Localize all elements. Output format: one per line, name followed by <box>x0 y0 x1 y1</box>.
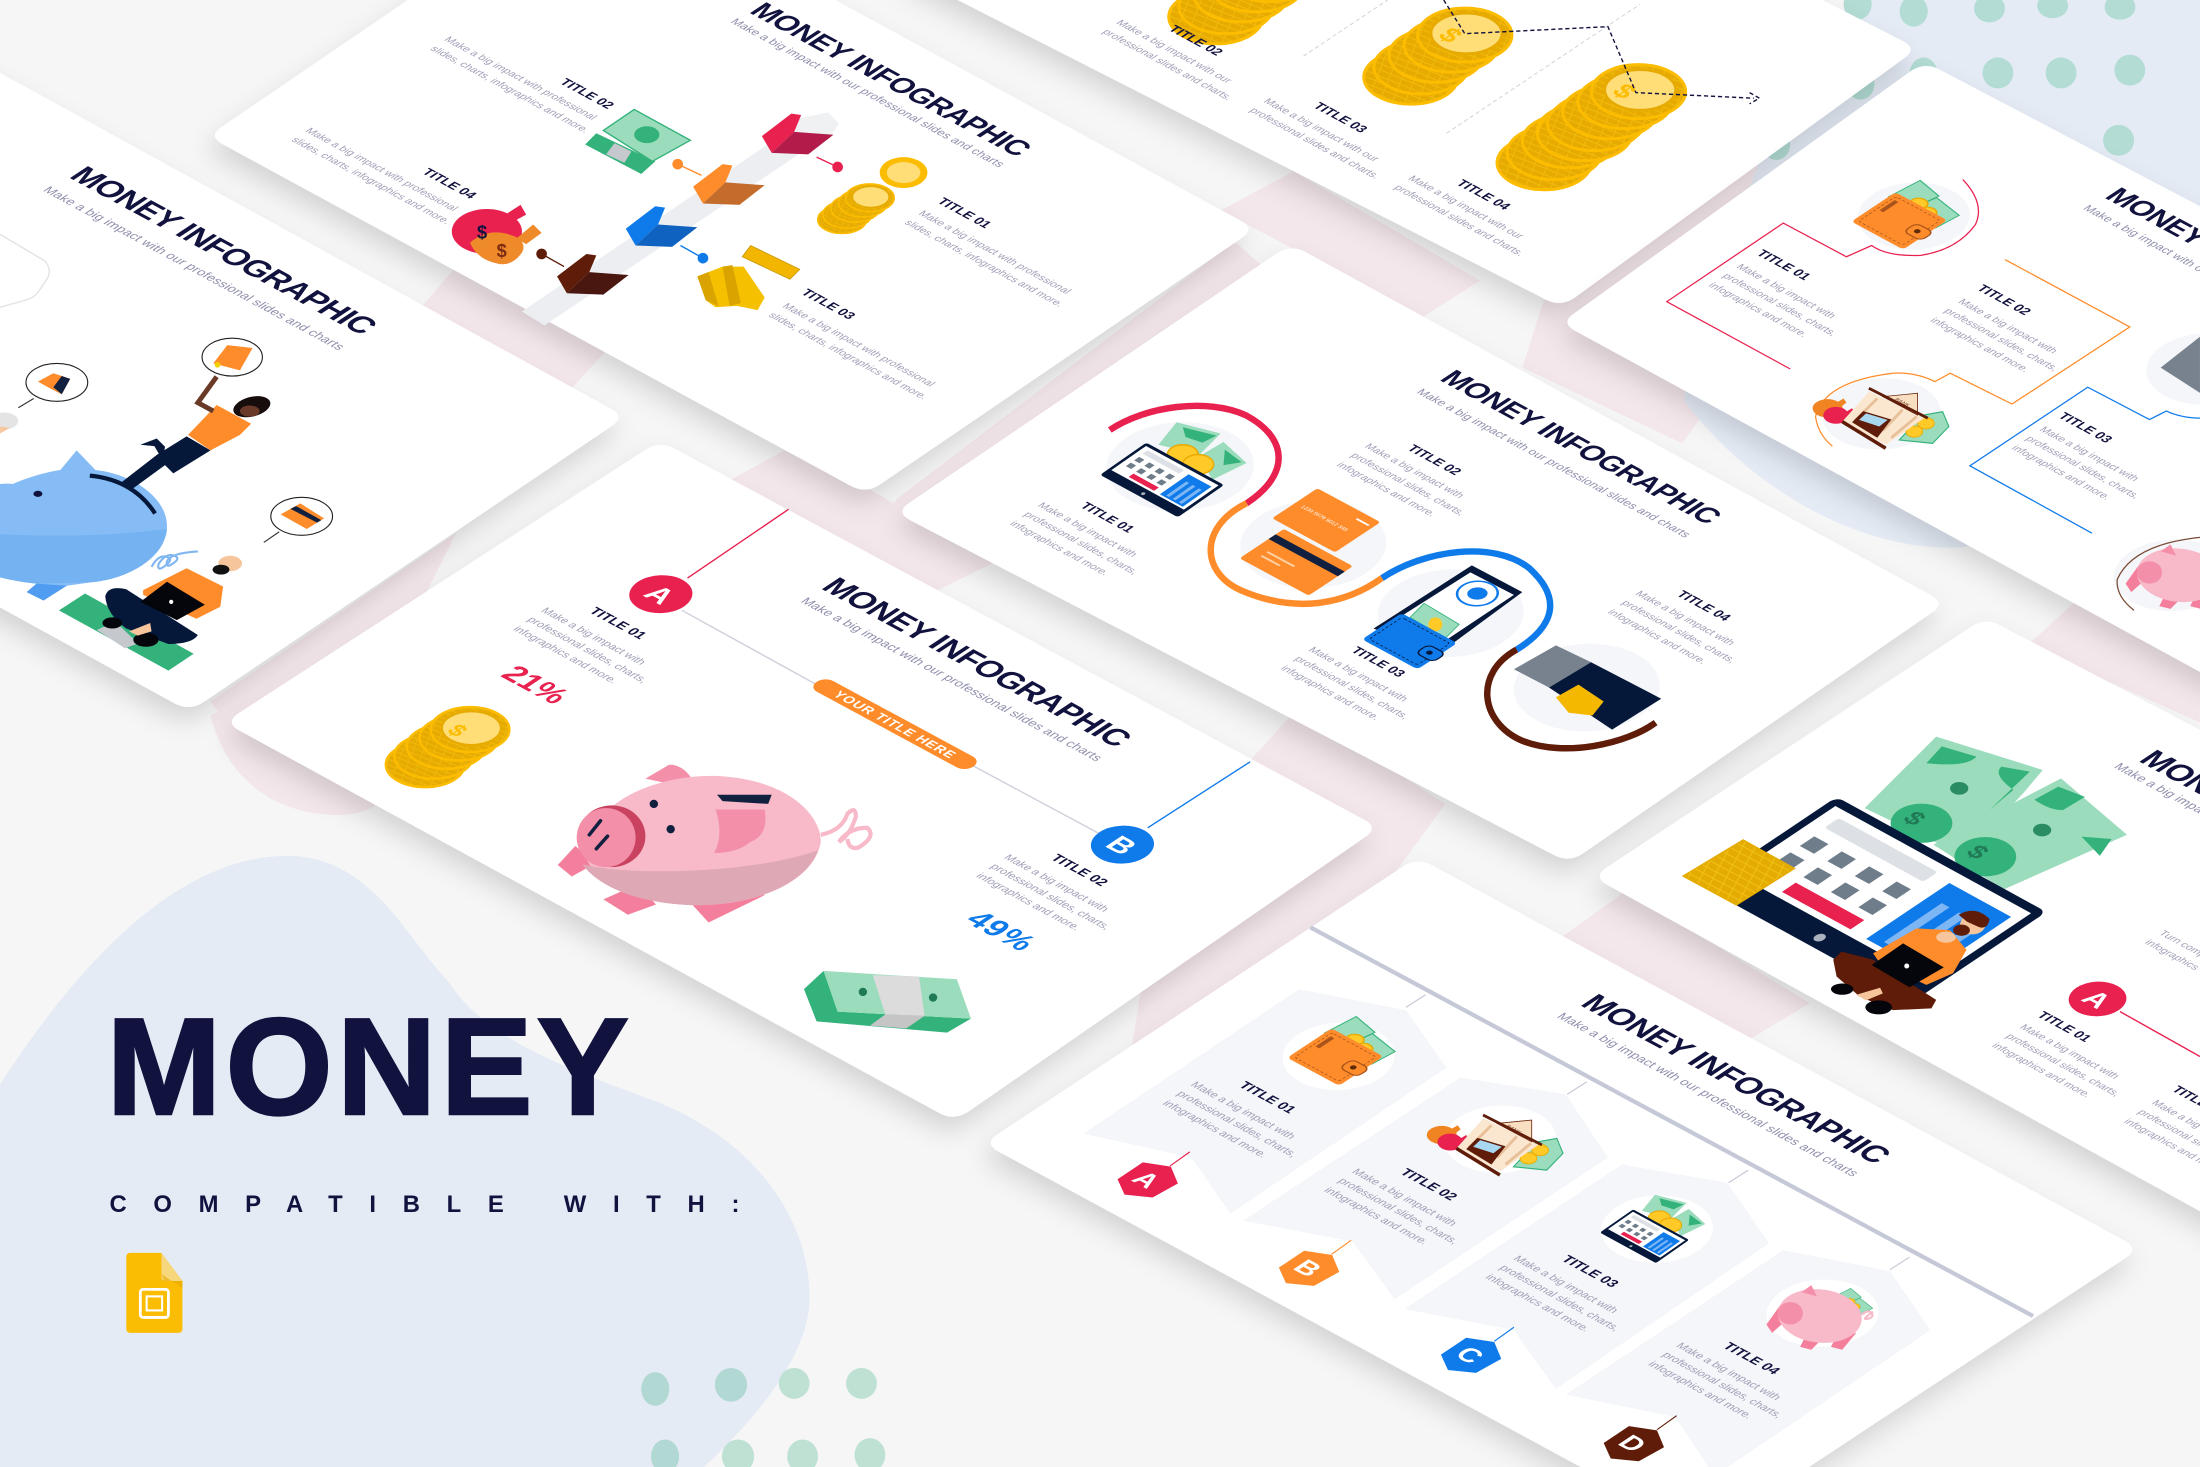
text block: title 02: infographics and more. <box>973 872 1083 932</box>
arc: dark <box>2117 537 2200 610</box>
panel: top-right slide with coin stacks <box>908 0 1911 303</box>
person: seated man with laptop <box>1831 911 1990 1014</box>
hex badge: A <box>1118 1152 1190 1197</box>
decorative pink shapes behind slides <box>210 140 2200 1052</box>
text block: title 02: Make a big impact with our <box>1113 18 1235 85</box>
text block: title 03: professional slides, charts, <box>1496 1264 1622 1333</box>
text block: title 01 <box>1989 1009 2137 1108</box>
connector line <box>2120 1012 2200 1056</box>
hex badge: C: C <box>1449 1342 1491 1368</box>
icon: money bags <box>452 205 542 264</box>
icon: large bills <box>1865 737 2127 890</box>
text block: title 04: Make a big impact with <box>1632 589 1738 647</box>
text block: title 02: infographics and more. <box>1321 1186 1431 1247</box>
dots: top-right green <box>1762 0 2145 160</box>
icon: coin stack 4: $ <box>1606 79 1644 103</box>
icon: credit cards <box>1240 488 1380 596</box>
icon circles <box>1259 1009 1902 1361</box>
badge: B <box>1078 818 1167 871</box>
slide card <box>215 0 1249 490</box>
text block: title 01 <box>1705 247 1854 347</box>
text block: title 04: slides, charts, infographics and more. <box>288 136 453 226</box>
text block: title 01: Make a big impact with <box>538 606 648 667</box>
tab panel 3 <box>1404 1165 1769 1389</box>
text block: title 04: professional slides and charts. <box>1391 183 1527 258</box>
icon: blue piggy bank <box>0 450 198 600</box>
slide card <box>1600 622 2200 1258</box>
subheading: Make a big impact with our professional slides and charts <box>1413 387 1694 540</box>
text block: title 02: professional slides, charts, <box>1335 1177 1461 1246</box>
text block: title 02 <box>2121 1084 2200 1183</box>
box outline: orange <box>1816 260 2130 446</box>
text block: title 02 <box>1334 442 1482 527</box>
badge: A: A <box>636 581 683 609</box>
text block: title 04: infographics and more. <box>1645 1360 1755 1421</box>
text block: title 01: Make a big impact with <box>1188 1080 1298 1141</box>
curve: blue <box>1382 551 1550 650</box>
text block: title 01: TITLE 01 <box>586 605 651 641</box>
text block: title 04: Make a big impact with professional <box>302 126 461 213</box>
text block: title 03: TITLE 03 <box>1558 1253 1623 1290</box>
text block: title 04: Make a big impact with our <box>1405 174 1527 241</box>
hex badge: D <box>1604 1416 1677 1461</box>
text block: title 04 <box>1645 1340 1799 1429</box>
icon: piggy with cash <box>1766 1285 1879 1350</box>
box outline: blue <box>1970 387 2200 533</box>
tab panel 1 <box>1083 989 1447 1214</box>
hex badge: B <box>1279 1240 1351 1286</box>
circle backgrounds <box>1798 169 2200 626</box>
icon: large bills: $ <box>1960 841 1995 863</box>
icon: coin stack 3: $ <box>1432 23 1470 47</box>
text block: title 01: professional slides, charts, <box>1719 272 1840 338</box>
text block: title 01: professional slides, charts, <box>1174 1090 1300 1159</box>
text block: title 02 <box>973 852 1127 941</box>
text block: title 01: professional slides, charts, <box>2003 1032 2123 1098</box>
text block: title 03 <box>2008 410 2157 510</box>
person: seated man with laptop <box>102 556 242 647</box>
text block: title 02: TITLE 02 <box>1047 852 1112 888</box>
tab panel 4 <box>1566 1250 1931 1467</box>
icon: pink piggy bank <box>558 765 871 922</box>
text block: title 02: professional slides, charts, <box>1941 307 2061 373</box>
heading: MONEY INFOGRAPHIC <box>743 0 1038 161</box>
subheading: Make a big impact with our professional slides and charts <box>727 17 1007 169</box>
text block: title 01: Make a big impact with <box>1035 501 1140 559</box>
icon: credit cards: 1234 5678 9012 345 <box>1299 505 1349 533</box>
panel: center slide with S-curve <box>902 248 1939 859</box>
curve: orange <box>1211 503 1382 604</box>
badge: A: A <box>2075 986 2119 1013</box>
hexagon outline fragment <box>0 234 49 307</box>
text block: title 02: Make a big impact with professional <box>441 35 600 122</box>
cube: brown <box>557 254 629 295</box>
text block: title 03: Make a big impact with <box>2036 425 2142 483</box>
text block: title 04: infographics and more. <box>1604 608 1710 666</box>
icon: phone and blue wallet <box>1362 565 1522 671</box>
icon: dollar bill and cash <box>585 109 690 174</box>
heading: MONEY INFOGRAPHIC <box>814 572 1141 752</box>
text block: title 02: slides, charts, infographics and more. <box>427 44 592 135</box>
tab connector ticks <box>1406 995 1910 1270</box>
text block: title 03: TITLE 03 <box>1310 100 1371 135</box>
heading: MONEY INFOGRAPHIC <box>62 161 386 340</box>
cash under seated man <box>59 593 194 671</box>
icon: wallet <box>1287 1015 1407 1087</box>
text block: title 02: professional slides and charts. <box>1099 28 1235 102</box>
text block: title 02: TITLE 02 <box>1973 283 2035 317</box>
text block: title 04: Make a big impact with <box>1673 1341 1783 1402</box>
text block: title 01: professional slides, charts, <box>1021 510 1141 576</box>
text block: title 03: Make a big impact with professional <box>779 302 938 388</box>
badge: A <box>2057 975 2138 1023</box>
icon: coin stack: $ <box>442 721 474 741</box>
icon: coin stack <box>386 707 509 787</box>
text block: title 02: TITLE 02 <box>556 76 618 111</box>
main title: MONEY <box>107 991 629 1144</box>
slide card <box>232 445 1372 1117</box>
text block: title 02 <box>1927 283 2075 382</box>
icon: bank: BANK <box>1504 1124 1522 1135</box>
icon: large bills: $ <box>1896 807 1932 830</box>
text block: title 01: Make a big impact with professional <box>915 209 1074 296</box>
icon: coins <box>818 157 927 233</box>
bubble: credit card icon <box>264 497 333 542</box>
hex badge: A: A <box>1125 1167 1167 1193</box>
icon: cash stack <box>804 971 971 1033</box>
text block: title 04: TITLE 04 <box>1453 177 1515 212</box>
text block: title 04: professional slides, charts, <box>1618 599 1739 665</box>
text block: title 02: infographics and more. <box>1334 460 1439 519</box>
panel: bottom slide with four tabs <box>991 862 2132 1467</box>
icon: coin stack 2 <box>1169 0 1317 44</box>
text block: title 03: TITLE 03 <box>798 287 859 321</box>
cube: red <box>762 112 839 154</box>
text block: title 01: infographics and more. <box>1160 1099 1270 1160</box>
slide card <box>908 0 1911 303</box>
text block: title 01: TITLE 01 <box>934 196 996 230</box>
blob: lower-left blue <box>0 856 810 1467</box>
circle backgrounds <box>1076 404 1690 749</box>
icon: piggy <box>2126 544 2200 609</box>
text block: title 01: professional slides, charts, <box>524 615 650 685</box>
cube: orange <box>693 164 765 205</box>
badge: B: B <box>1098 831 1144 860</box>
stat: 49%: 49% <box>958 906 1044 956</box>
icon: coin stack 4 <box>1497 65 1686 190</box>
off-canvas figure fragment <box>0 412 18 434</box>
text block: title 02: TITLE 02 <box>1397 1166 1462 1203</box>
pill: your title here <box>808 676 982 772</box>
panel: right slide with outlined boxes <box>1567 66 2200 696</box>
text block: title 01 <box>510 605 664 694</box>
text block: title 01: infographics and more. <box>1989 1041 2094 1099</box>
panel: top slide with growth bars <box>215 0 1249 490</box>
text block: title 02: Make a big impact with <box>1349 1167 1459 1228</box>
text block: title 02: infographics and more. <box>1927 316 2032 374</box>
text block: title 03: infographics and more. <box>1277 664 1383 722</box>
icon: gold coins <box>1683 840 1794 905</box>
icon: large tablet <box>1703 797 2046 1002</box>
tab panel 2 <box>1243 1078 1608 1299</box>
connector lines <box>682 509 1250 835</box>
text block: title 01: TITLE 01 <box>1235 1079 1300 1116</box>
text block: title 04: TITLE 04 <box>1720 1340 1784 1377</box>
text block: title 04: professional slides, charts, <box>1659 1351 1785 1420</box>
subheading: Make a big impact with our professional slides and charts <box>40 184 349 352</box>
text block: title 04 <box>1604 588 1753 674</box>
slide card <box>0 30 619 707</box>
text block: title 03: TITLE 03 <box>2055 410 2116 445</box>
text block: title 03 <box>1277 645 1426 730</box>
slide card <box>1567 66 2200 696</box>
beam <box>522 118 836 326</box>
arrow: dashed trend line <box>1444 0 1759 104</box>
curve: red <box>1110 406 1279 503</box>
text block: title 03: TITLE 03 <box>1348 645 1409 679</box>
slide card <box>991 862 2132 1467</box>
text block: title 02: TITLE 02 <box>1404 442 1465 477</box>
icon: safe with gold <box>1514 645 1661 730</box>
bubble: house icon <box>18 363 88 408</box>
text block: title 03: Make a big impact with <box>1510 1254 1621 1315</box>
dashed guides <box>1303 0 1640 133</box>
pill: your title here: YOUR TITLE HERE <box>830 689 960 760</box>
text block: title 03: professional slides, charts, <box>2022 434 2143 501</box>
text block: title 04: TITLE 04 <box>419 166 481 201</box>
icon: bank <box>1427 1115 1563 1175</box>
icon: wallet <box>1851 178 1971 251</box>
text block: title 01: TITLE 01 <box>2034 1009 2096 1044</box>
text block: title 03: professional slides, charts, <box>1291 655 1412 721</box>
text block: title 01 <box>1160 1079 1314 1168</box>
panel: center-left slide with pink piggy <box>232 445 1372 1117</box>
text block: title 01: TITLE 01 <box>1753 247 1815 282</box>
text block: title 01: TITLE 01 <box>1077 500 1139 535</box>
hex badge: C <box>1441 1327 1514 1373</box>
bubble: certificate icon <box>202 338 262 376</box>
hex badge: B: B <box>1287 1255 1329 1281</box>
heading: MONEY INFOGRAPHIC <box>1433 366 1729 529</box>
subheading: Make a big impact with our professional slides and charts <box>798 595 1106 763</box>
text block: title 02: TITLE 02 <box>1165 23 1227 58</box>
text block: title 01: infographics and more. <box>1705 281 1811 339</box>
icon: bank <box>1813 388 1949 448</box>
hex badge: D: D <box>1612 1431 1653 1456</box>
text block: title 02: Make a big impact with <box>1001 853 1111 914</box>
icon: gold bars <box>697 246 800 310</box>
text block: title 01: infographics and more. <box>1007 519 1112 577</box>
top rule <box>1310 927 2033 1316</box>
icon: google slides <box>126 1253 182 1333</box>
text block: title 01: slides, charts, infographics and more. <box>901 218 1067 309</box>
icon: tablet with cash <box>1100 422 1247 517</box>
text block: title 01: Make a big impact with <box>1733 262 1839 320</box>
icon: safe <box>2161 337 2200 393</box>
text block: title 03 <box>1482 1253 1636 1342</box>
badge: A <box>616 567 705 621</box>
connector dots <box>536 157 843 267</box>
curve: brown <box>1487 650 1656 748</box>
subheading: Make a big impact with our professional slides and charts <box>1554 1010 1863 1179</box>
stat: 21%: 21% <box>494 660 577 709</box>
text block: title 01 <box>1007 500 1155 586</box>
slide card <box>902 248 1939 859</box>
icon: coin stack 3 <box>1364 8 1512 104</box>
text block: title 03: slides, charts, infographics and more. <box>765 311 930 401</box>
cube: blue <box>626 206 697 247</box>
text block: title 03: professional slides and charts. <box>1247 106 1383 181</box>
panel: right lower slide with tablet <box>1600 622 2200 1258</box>
text block: title 02: Make a big impact with <box>1955 297 2060 356</box>
text block: title 02 <box>1321 1166 1475 1255</box>
text block: title 03: infographics and more. <box>1482 1273 1593 1334</box>
blob: top-right blue <box>1684 0 2200 548</box>
text block: title 03: Make a big impact with our <box>1260 97 1382 164</box>
icon: bank: BANK <box>1892 398 1911 408</box>
panel: left slide with blue piggy <box>0 30 619 707</box>
text block: title 02: professional slides, charts, <box>1348 451 1468 517</box>
box outline: red <box>1667 180 1978 369</box>
text block: title 04: TITLE 04 <box>1673 588 1735 623</box>
text block: title 03: Make a big impact with <box>1305 645 1411 704</box>
icon: tablet <box>1600 1195 1705 1263</box>
dots: bottom green <box>641 1368 885 1467</box>
icon: money bags: $ <box>477 222 487 243</box>
compatible with label: COMPATIBLE WITH: <box>109 1191 739 1218</box>
icon: money bags: $ <box>497 240 507 261</box>
person: woman standing on piggy <box>119 377 273 488</box>
heading: MONEY INFOGRAPHIC <box>1573 989 1900 1169</box>
text block: title 01: Make a big impact with <box>2017 1023 2122 1081</box>
text block: title 01: infographics and more. <box>510 625 620 685</box>
text block: title 02: professional slides, charts, <box>987 862 1113 932</box>
text block: title 02: Make a big impact with <box>1362 442 1467 500</box>
text block: title 03: infographics and more. <box>2008 444 2114 502</box>
